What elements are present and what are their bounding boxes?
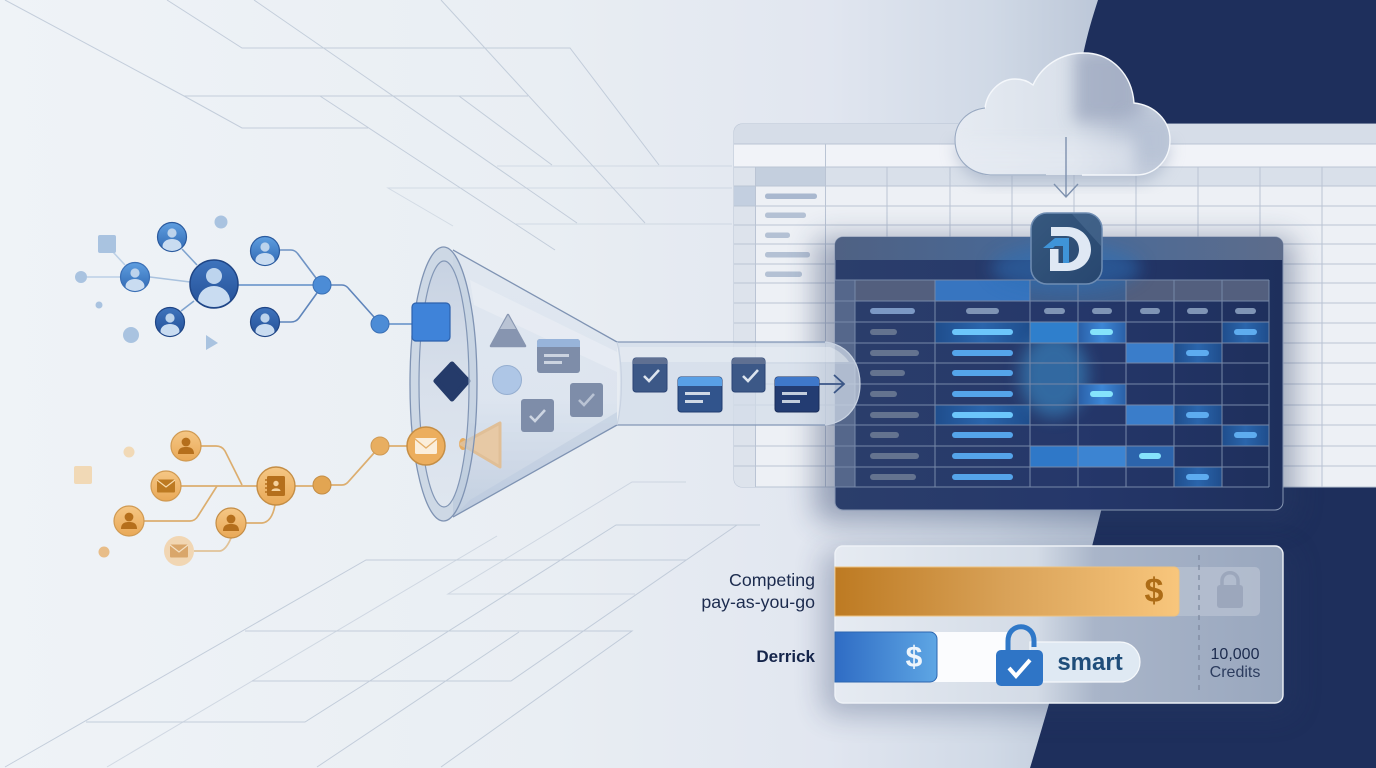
- funnel cone: [453, 250, 617, 517]
- funnel: [407, 247, 860, 521]
- mail node: [151, 471, 181, 501]
- credits label: 10,000: [1211, 646, 1260, 663]
- tube cards: [633, 358, 819, 412]
- funnel rim: [410, 247, 477, 521]
- credits label: [1210, 646, 1260, 681]
- locked credits track: [1150, 567, 1260, 616]
- pricing comparison panel: pay-as-you-go: [701, 592, 815, 612]
- blue bar: [835, 632, 937, 682]
- white track: [835, 632, 1010, 682]
- icon: padlock: [1217, 573, 1243, 608]
- smart pill: smart: [1057, 649, 1123, 676]
- orange mail badge: [407, 427, 445, 465]
- faded mail node: [164, 536, 194, 566]
- table cell bars: [870, 308, 1257, 480]
- icon: open padlock: [996, 627, 1043, 686]
- blue dollar: $: [906, 641, 923, 674]
- tube: [617, 342, 860, 425]
- orange dollar: $: [1145, 572, 1164, 610]
- person nodes: [114, 431, 246, 538]
- derrick label: Derrick: [756, 647, 816, 666]
- items inside cone: [436, 315, 603, 467]
- contact nodes: [120, 222, 280, 338]
- logo badge: [1031, 213, 1102, 284]
- central contact: [190, 260, 238, 316]
- decorative orange shapes: [74, 446, 134, 558]
- cloud: [955, 50, 1175, 197]
- cloud download arrow: [1054, 137, 1078, 197]
- dashed credit limit line: [1198, 555, 1200, 693]
- dark results table: [815, 237, 1295, 522]
- sheet row labels: [765, 194, 817, 277]
- credits label: Credits: [1210, 664, 1260, 681]
- navy background shape: [1030, 0, 1376, 768]
- competing label: Competing: [729, 570, 815, 590]
- orange bar: [835, 567, 1179, 616]
- funnel mouth interior: [419, 261, 469, 507]
- heatmap cells: [935, 322, 1269, 487]
- blue contact network: [75, 216, 412, 350]
- address book node: [257, 467, 295, 505]
- decorative blue shapes: [75, 216, 228, 350]
- output arrow: [819, 375, 844, 393]
- background spreadsheet: [734, 124, 1376, 487]
- pricing comparison panel: [701, 546, 1294, 715]
- smart pill: [1030, 642, 1140, 682]
- blue connector lines: [87, 249, 412, 324]
- orange connector lines: [144, 446, 407, 551]
- orange contact network: [74, 431, 407, 566]
- blue input square: [412, 303, 450, 341]
